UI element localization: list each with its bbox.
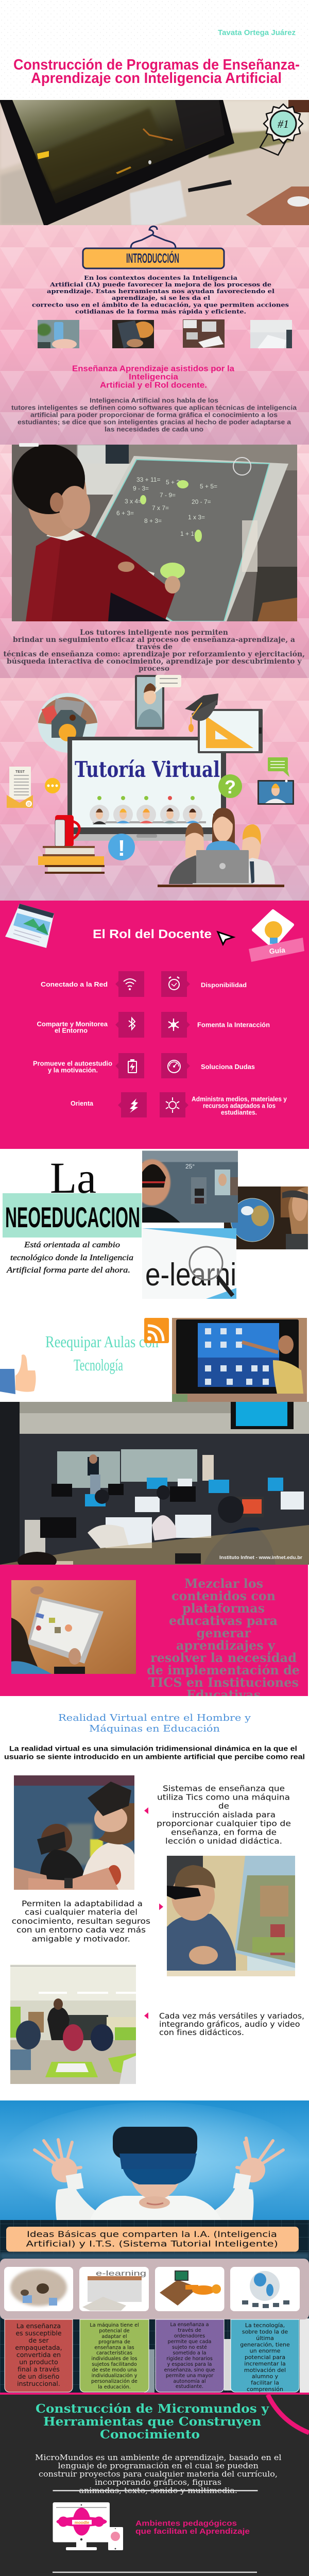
card: teal: última: [256, 2335, 274, 2342]
panel: realidad virtual: [4, 1713, 305, 2084]
photo: tablet on table: [112, 320, 154, 348]
icon: test document in envelope: TEST: [15, 770, 25, 774]
photo: boy with VR glasses: [167, 1856, 295, 1976]
icon: person typing at laptop, top view: [38, 693, 98, 753]
card: red: de un diseño: [18, 2372, 59, 2380]
icon: monitor: [67, 737, 234, 841]
card: green: personalización de: [91, 2378, 138, 2384]
panel: mezclar los contenidos: [0, 1565, 308, 1702]
image: globe with laptops: [230, 2267, 300, 2311]
text block: definición: [4, 1744, 305, 1761]
icon: exclamation mark: [108, 834, 135, 861]
text block: tutores inteligentes permiten: través de: [136, 643, 173, 651]
text block: tutores inteligentes permiten: [3, 629, 305, 673]
text block: adaptabilidad: con un entorno cada vez más: [16, 1925, 146, 1935]
photo: e-learning magnifying glass: [142, 1228, 236, 1299]
card: red: empaquetada,: [15, 2344, 62, 2351]
author name: Tavata Ortega Juárez: [218, 29, 296, 37]
text block: adaptabilidad: casi cualquier materia del: [25, 1907, 138, 1917]
icon: white tab above photo: [19, 443, 39, 447]
heading: realidad virtual: [58, 1713, 251, 1734]
text block: micromundos: incorporando gráficos, figuras: [95, 2479, 221, 2487]
heading: neoeducacion: NEOEDUCACION: [5, 1201, 140, 1233]
text block: adaptabilidad: amigable y motivador.: [32, 1934, 130, 1943]
icon: tablet with set square: [198, 709, 263, 753]
arrow: right marker: [159, 1903, 163, 1910]
monitor title: Tutoría Virtual: Tutoría Virtual: [75, 757, 220, 782]
card: purple: través de: [178, 2327, 201, 2333]
panel: la neoeducación: [0, 1151, 309, 1570]
heading banner: introducción: INTRODUCCIÓN: [126, 250, 179, 266]
heading: realidad virtual: Realidad Virtual entre el Hombre y: [58, 1713, 251, 1723]
label: ambientes pedagógicos: Ambientes pedagógicos: [135, 2519, 237, 2528]
card: teal: comprensión: [247, 2386, 283, 2393]
text block: neoeducación: [6, 1241, 133, 1275]
item: promueve el autoestudio: y la motivación.: [48, 1066, 98, 1074]
arrow: left marker: [144, 2012, 148, 2019]
text block: mezclar los contenidos: Mezclar los: [184, 1576, 263, 1591]
heading box: ideas básicas: [6, 2227, 299, 2251]
text block: micromundos: animadas, texto, sonido y multimedia.: [79, 2487, 237, 2495]
item: administra medios: [160, 1092, 287, 1117]
heading box: ideas básicas: Ideas Básicas que comparten la I.A. (Inteligencia: [27, 2229, 277, 2239]
text block: mezclar los contenidos: TICS en Instituciones: [148, 1675, 299, 1690]
item: administra medios: Administra medios, materiales y: [192, 1095, 287, 1103]
text block: mezclar los contenidos: [147, 1576, 300, 1702]
heading: Enseñanza Aprendizaje: Artificial y el Rol docente.: [100, 381, 207, 389]
item: comparte y monitorea: Comparte y Monitorea: [37, 1020, 108, 1028]
card: purple: La enseñanza a: [170, 2322, 209, 2328]
text block: adaptabilidad: [12, 1899, 150, 1943]
panel: construcción de micromundos: [0, 2393, 309, 2576]
card: purple: y espacios para la: [167, 2362, 212, 2367]
photo: boy using an interactive math table: 9 - 3=: [133, 485, 149, 492]
heading: realidad virtual: Máquinas en Educación: [89, 1723, 220, 1734]
photo: boy using an interactive math table: 7 x 7=: [152, 504, 169, 512]
icon: award badge: [260, 104, 303, 155]
text block: introduction: Artificial (IA) puede favorecer la mejora de los procesos de: [49, 281, 271, 288]
icon: teacher on phone screen: [135, 675, 181, 730]
icon: desktop and phone with moodle diagram: moodle: [75, 2520, 90, 2525]
item: administra medios: estudiantes.: [221, 1109, 257, 1116]
text block: definición: La realidad virtual es una simulación tridimensional dinámica en la que el: [9, 1744, 297, 1753]
heading: el rol del docente: El Rol del Docente: [93, 927, 212, 941]
text block: introduction: aprendizaje, si se les da el: [112, 294, 211, 301]
photo: boy using an interactive math table: 5 + 5=: [200, 483, 217, 490]
photo: computer and keyboard: [250, 320, 292, 348]
icon: typing bubble: [45, 778, 60, 793]
photo: boy using an interactive math table: 5 + 2=: [166, 479, 183, 486]
heading: reequipar aulas con tecnología: Reequipar Aulas con: [45, 1332, 159, 1351]
photo: boy using an interactive math table: 8 + 3=: [144, 517, 162, 524]
item: comparte y monitorea: el Entorno: [55, 1026, 88, 1035]
card: teal: sobre todo la de: [242, 2329, 288, 2335]
card: teal: incrementar la: [244, 2361, 286, 2367]
item: orienta: [71, 1092, 147, 1117]
card: green: programa de: [98, 2339, 130, 2345]
card: green: adaptar el: [101, 2334, 127, 2340]
heading: Enseñanza Aprendizaje: Enseñanza Aprendizaje asistidos por la: [72, 365, 234, 373]
icon: question mark: ?: [225, 776, 236, 798]
photo: hand holding smartphone: [38, 320, 79, 348]
text block: tutores inteligentes permiten: proceso: [139, 665, 169, 673]
icon: question mark: [218, 774, 242, 798]
heading: neoeducacion: [3, 1193, 142, 1238]
panel: el rol del docente: [0, 901, 309, 1149]
text block: mezclar los contenidos: generar: [197, 1625, 251, 1640]
item: disponibilidad: [161, 971, 247, 997]
image: office group: [4, 2267, 73, 2311]
photo: laptops on a desk: [183, 319, 225, 348]
card: purple: rigidez de horarios: [166, 2356, 213, 2362]
card: green: enseñanza a las: [94, 2345, 134, 2350]
heading: reequipar aulas con tecnología: [45, 1332, 159, 1374]
item: comparte y monitorea: [37, 1012, 144, 1038]
item: conectado a la red: Conectado a la Red: [41, 980, 108, 988]
card: green: la educación.: [98, 2384, 131, 2390]
text block: tutores inteligentes permiten: búsqueda interactiva de conocimiento, aprendizaje por descubrimiento y: [7, 657, 302, 666]
text block: tutores inteligentes: artificial para poder proporcionar de forma gráfica el conocimiento a los: [30, 411, 278, 418]
text block: introduction: aprendizaje. Estas herramientas nos ayudan favoreciendo el: [47, 287, 275, 295]
card: green: potencial de: [99, 2328, 130, 2334]
text block: versátiles: Cada vez más versátiles y variados,: [159, 2011, 304, 2021]
text block: sistemas de enseñanza: [157, 1784, 291, 1845]
card: purple: permite una mayor: [166, 2373, 213, 2379]
icon: test document in envelope: [7, 767, 33, 808]
card: purple: sujeto no esté: [172, 2344, 207, 2350]
heading: construcción de micromundos: Conocimiento: [100, 2428, 200, 2442]
heading: reequipar aulas con tecnología: Tecnología: [74, 1355, 123, 1374]
illustration: tutoría virtual: [7, 675, 294, 887]
card: purple: [156, 2319, 224, 2392]
photo: man with augmented reality interface: [142, 1151, 238, 1223]
panel: header: [0, 0, 309, 100]
card: red: instruccional.: [17, 2380, 60, 2387]
photo: people with VR headsets: [14, 1775, 134, 1890]
photo: boy using an interactive math table: [12, 445, 297, 621]
card: teal: facilitar la: [251, 2379, 279, 2386]
card: green: [80, 2319, 149, 2392]
hero photo: desktop monitor on a desk: [0, 100, 309, 225]
text block: tutores inteligentes: estudiantes; se dice que son inteligentes gracias al hecho de poder adaptarse a: [18, 418, 291, 426]
item: orienta: Orienta: [71, 1099, 94, 1107]
text block: neoeducación: Está orientada al cambio: [24, 1241, 120, 1249]
card: teal: un enorme: [250, 2347, 281, 2354]
item: fomenta la interacción: [161, 1012, 270, 1038]
text block: sistemas de enseñanza: lección o unidad didáctica.: [165, 1836, 282, 1845]
icon: decorative arc: [268, 2395, 309, 2433]
heading: Enseñanza Aprendizaje: [72, 365, 234, 389]
image: e-learning window: e-learning: [96, 2269, 146, 2277]
card: purple: permite que cada: [168, 2339, 211, 2345]
heading: construcción de micromundos: Herramientas que Construyen: [43, 2415, 261, 2429]
card: red: final a través: [18, 2365, 60, 2373]
item: disponibilidad: Disponibilidad: [201, 981, 247, 989]
photo: boy using an interactive math table: 33 + 11=: [136, 476, 161, 483]
icon: online status row: [90, 796, 206, 824]
icon: rss feed: [144, 1318, 169, 1343]
card: purple: ordenadores: [174, 2333, 205, 2339]
text block: versátiles: [159, 2011, 304, 2037]
heading: construcción de micromundos: Construcción de Micromundos y: [36, 2402, 269, 2416]
heading box: ideas básicas: Artificial) y I.T.S. (Sistema Tutorial Inteligente): [26, 2239, 278, 2248]
text block: tutores inteligentes: [11, 397, 297, 433]
item: conectado a la red: [41, 971, 144, 997]
item: administra medios: recursos adaptados a los: [203, 1101, 276, 1110]
text block: mezclar los contenidos: contenidos con: [171, 1588, 276, 1603]
text block: introduction: cotidianas de la forma más rápida y eficiente.: [75, 308, 246, 315]
card: teal: generación, tiene: [240, 2341, 290, 2348]
icon: idea bulb with Guía ribbon: [249, 911, 304, 962]
text block: tutores inteligentes permiten: técnicas de enseñanza como: aprendizaje por reforzamiento y ejercitación,: [3, 650, 305, 658]
icon: red mug: [55, 815, 79, 846]
text block: introduction: [32, 274, 289, 315]
text block: tutores inteligentes: Inteligencia Artificial nos habla de los: [90, 397, 218, 404]
card: green: individualización y: [92, 2372, 138, 2379]
text block: neoeducación: tecnológico donde la Inteligencia: [10, 1253, 133, 1262]
text block: introduction: correcto uso en el ámbito de la educación, ya que permiten acciones: [32, 301, 289, 308]
text block: micromundos: construir proyectos para cualquier materia del currículo,: [39, 2470, 278, 2479]
panel: ideas básicas: [0, 2220, 309, 2393]
photo: man with augmented reality interface: 25°: [185, 1163, 195, 1170]
text block: versátiles: con fines didácticos.: [159, 2028, 244, 2037]
photo: child with VR headset: [0, 2100, 309, 2220]
text block: tutores inteligentes permiten: Los tutores inteligente nos permiten: [80, 629, 228, 637]
card: teal: potencial para: [245, 2354, 285, 2361]
item: promueve el autoestudio: Promueve el autoestudio: [33, 1059, 112, 1067]
photo: boy using an interactive math table: 1 + 1=: [180, 530, 198, 537]
photo: boy using an interactive math table: 7 - 9=: [160, 492, 176, 499]
item: promueve el autoestudio: [33, 1053, 144, 1078]
item: soluciona dudas: [161, 1053, 255, 1078]
card: green: individuales de los: [91, 2356, 138, 2362]
icon: test document in envelope: @: [27, 802, 31, 806]
card: red: convertida en: [16, 2351, 61, 2359]
arrow: left marker: [144, 1807, 148, 1814]
text block: adaptabilidad: conocimiento, resultan seguros: [12, 1917, 150, 1926]
text block: adaptabilidad: Permiten la adaptabilidad a: [22, 1899, 143, 1908]
photo: boy using an interactive math table: 3 x 4=: [125, 498, 142, 505]
icon: idea bulb with Guía ribbon: Guía: [269, 946, 286, 955]
icon: video call tablet: [258, 780, 294, 805]
card: teal: motivación del: [244, 2367, 286, 2374]
title: [13, 57, 300, 87]
text block: mezclar los contenidos: resolver la necesidad: [150, 1650, 297, 1665]
text block: sistemas de enseñanza: Sistemas de enseñanza que: [163, 1784, 285, 1793]
photo: child using tablet: [11, 1580, 136, 1674]
card: red: de ser: [29, 2336, 49, 2344]
text block: sistemas de enseñanza: de: [218, 1801, 229, 1810]
icon: graduation cap: [185, 693, 218, 732]
card: purple: enseñanza, sino que: [164, 2367, 215, 2373]
card: green: características: [96, 2350, 132, 2356]
card: purple: sometido a la: [173, 2350, 207, 2356]
text block: sistemas de enseñanza: instrucción aislada para: [172, 1810, 276, 1820]
text block: mezclar los contenidos: Educativas: [186, 1687, 261, 1702]
icon: cursor arrow: [218, 932, 233, 944]
heading word: La: La: [50, 1153, 96, 1202]
text block: versátiles: integrando gráficos, audio y video: [159, 2020, 300, 2029]
photo: computer classroom: [0, 1402, 309, 1565]
icon: green speech bubble: [268, 757, 289, 777]
image: figure at a desk: [155, 2267, 225, 2311]
text block: mezclar los contenidos: de implementación de: [147, 1663, 300, 1677]
item: fomenta la interacción: Fomenta la Interacción: [197, 1021, 270, 1028]
photo: woman with holographic globe: [224, 1187, 308, 1249]
icon: desktop and phone with moodle diagram: [53, 2502, 123, 2550]
text block: sistemas de enseñanza: utiliza Tics como una máquina: [157, 1793, 290, 1802]
card: red: un producto: [19, 2358, 58, 2366]
card: green: sujetos facilitando: [92, 2362, 137, 2367]
image: e-learning window: [79, 2267, 149, 2311]
card: red: [5, 2319, 73, 2392]
card: green: de este modo una: [92, 2367, 136, 2373]
label: ambientes pedagógicos: que facilitan el Aprendizaje: [135, 2527, 250, 2536]
card: purple: autonomía al: [173, 2378, 206, 2384]
card: teal: La tecnología,: [245, 2322, 285, 2329]
text block: tutores inteligentes permiten: brindar un seguimiento eficaz al proceso de enseñanza-aprendizaje, a: [13, 636, 295, 644]
icon: stack of books: [38, 846, 105, 874]
text block: micromundos: MicroMundos es un ambiente de aprendizaje, basado en el: [35, 2454, 282, 2462]
icon: award badge: #1: [278, 117, 289, 130]
photo: virtual classroom simulation: [10, 1964, 136, 2084]
icon: web document: [5, 904, 54, 948]
illustration: three students with laptop: [158, 808, 284, 887]
icon: exclamation mark: !: [118, 836, 125, 861]
title: Aprendizaje con Inteligencia Artificial: [31, 70, 282, 87]
text block: mezclar los contenidos: educativas para: [169, 1613, 278, 1628]
card: red: La enseñanza: [16, 2322, 61, 2330]
text block: mezclar los contenidos: aprendizajes y: [176, 1638, 276, 1653]
label: ambientes pedagógicos: [135, 2519, 250, 2536]
heading: Enseñanza Aprendizaje: Inteligencia: [129, 373, 178, 381]
card: teal: [231, 2319, 299, 2393]
text block: sistemas de enseñanza: proporcionar cualquier tipo de: [157, 1819, 291, 1828]
photo: boy using an interactive math table: 6 + 3=: [116, 510, 134, 517]
text block: introduction: En los contextos docentes la Inteligencia: [84, 274, 238, 281]
heading banner: introducción: [83, 226, 224, 268]
panel: introduction pink background: [0, 225, 309, 901]
item: soluciona dudas: Soluciona Dudas: [201, 1063, 255, 1071]
text block: definición: usuario se siente introducido en un ambiente artificial que percibe como real: [4, 1753, 305, 1761]
photo caption: Instituto Infnet - www.infnet.edu.br: [219, 1555, 303, 1560]
text block: micromundos: [35, 2454, 282, 2495]
text block: mezclar los contenidos: plataformas: [182, 1601, 265, 1616]
photo: man pointing at large touch screen: [172, 1318, 307, 1402]
text block: sistemas de enseñanza: enseñanza, en forma de: [171, 1828, 277, 1837]
icon: thumbs up: [0, 1354, 36, 1394]
text block: tutores inteligentes: tutores inteligentes se definen como softwares que aplican técnicas de inteligencia: [11, 404, 297, 411]
text block: micromundos: lenguaje de programación en el cual se pueden: [58, 2462, 259, 2470]
card: purple: estudiante.: [176, 2384, 203, 2389]
card: red: es susceptible: [15, 2329, 62, 2337]
heading: construcción de micromundos: [36, 2402, 269, 2442]
photo: boy using an interactive math table: 1 x 3=: [188, 514, 205, 521]
text block: tutores inteligentes: las necesidades de cada uno: [105, 426, 203, 433]
text block: neoeducación: Artificial forma parte del ahora.: [6, 1266, 130, 1275]
panel: image strip: [0, 2259, 309, 2319]
card: green: La máquina tiene el: [90, 2322, 139, 2328]
photo: boy using an interactive math table: 20 - 7=: [192, 498, 211, 505]
card: teal: alumno y: [252, 2373, 279, 2380]
